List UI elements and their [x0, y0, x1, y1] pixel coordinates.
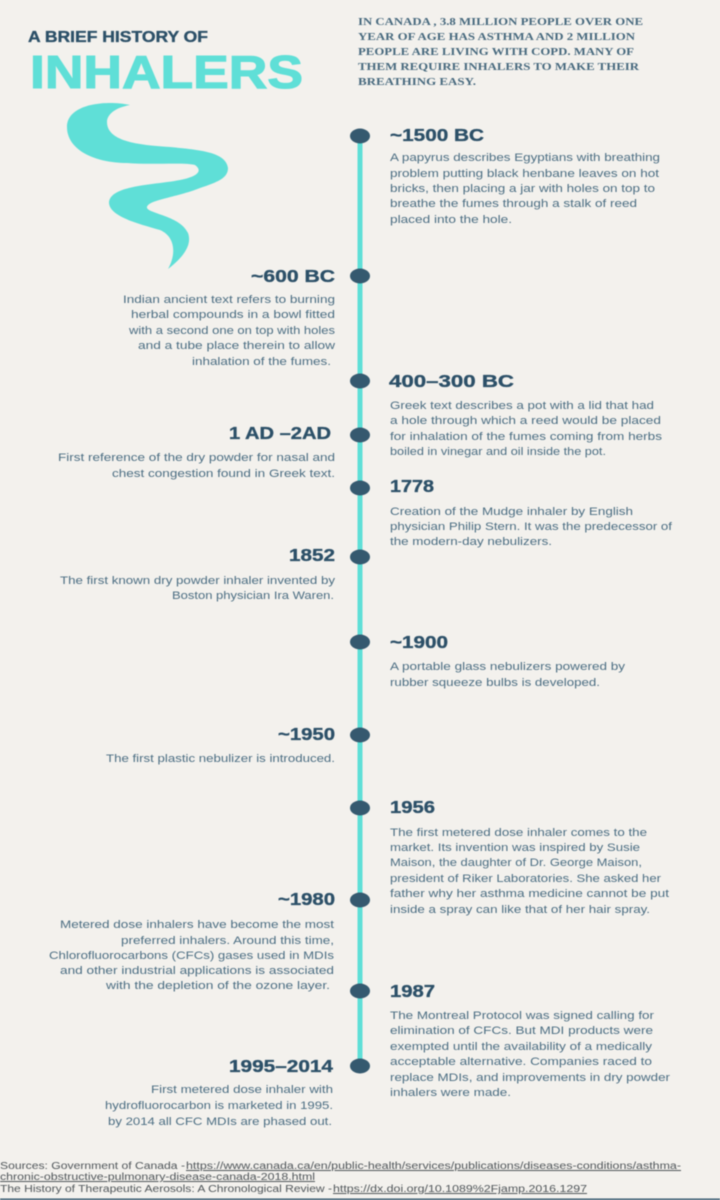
event: ~1900	[390, 632, 626, 689]
event: 1987: elimination of CFCs. But MDI products were	[390, 1025, 653, 1037]
event: 1852: The first known dry powder inhaler invented by	[60, 575, 336, 587]
event: 1956: market. Its invention was inspired by Susie	[390, 842, 640, 854]
event: ~600 BC	[123, 266, 336, 368]
event: 1778: 1778	[390, 476, 434, 496]
event: ~1980: with the depletion of the ozone layer.	[105, 980, 330, 992]
event: 1987	[390, 981, 670, 1099]
event: 1778: physician Philip Stern. It was the predecessor of	[390, 521, 673, 533]
event: 1852	[60, 545, 336, 602]
event: 400-300 BC	[389, 371, 663, 458]
event: 400-300 BC: 400–300 BC	[389, 371, 514, 391]
event: ~1900: ~1900	[390, 632, 448, 652]
event: 1 AD - 2AD: 1 AD –2AD	[229, 423, 331, 443]
event: ~1980	[49, 889, 335, 992]
event: 400-300 BC: for inhalation of the fumes coming from herbs	[390, 431, 663, 443]
intro text block: YEAR OF AGE HAS ASTHMA AND 2 MILLION	[358, 31, 635, 43]
event: 400-300 BC: a hole through which a reed would be placed	[390, 415, 661, 427]
event: 1995-2014: 1995–2014	[229, 1056, 333, 1076]
event: 1 AD - 2AD: First reference of the dry powder for nasal and	[58, 452, 335, 464]
sources	[0, 1161, 681, 1195]
event: 1852: 1852	[289, 545, 335, 565]
event: 1995-2014: by 2014 all CFC MDIs are phased out.	[108, 1116, 332, 1128]
event: ~600 BC: ~600 BC	[251, 266, 335, 286]
event: 1956: father why her asthma medicine cannot be put	[390, 888, 669, 900]
event: ~1500 BC: ~1500 BC	[390, 125, 484, 145]
event: ~1900: A portable glass nebulizers powered by	[390, 661, 626, 673]
event: ~1500 BC: A papyrus describes Egyptians with breathing	[390, 152, 660, 164]
event: 1987: inhalers were made.	[390, 1087, 511, 1099]
event: ~1500 BC	[390, 125, 660, 226]
event: ~1950: The first plastic nebulizer is introduced.	[106, 753, 335, 765]
event: ~1950: ~1950	[278, 724, 335, 744]
event: 1956	[390, 797, 669, 916]
event: 1 AD - 2AD: chest congestion found in Greek text.	[112, 468, 335, 480]
event: 1956: Maison, the daughter of Dr. George Maison,	[390, 857, 642, 869]
event: 1956: president of Riker Laboratories. She asked her	[390, 873, 661, 885]
event: ~1980: Chlorofluorocarbons (CFCs) gases used in MDIs	[49, 950, 335, 962]
event: ~1500 BC: bricks, then placing a jar with holes on top to	[390, 183, 655, 195]
event: 1987: acceptable alternative. Companies raced to	[390, 1056, 652, 1068]
event: 1852: Boston physician Ira Waren.	[172, 590, 334, 602]
event: 1778: Creation of the Mudge inhaler by English	[390, 506, 633, 518]
event: ~600 BC: inhalation of the fumes.	[192, 356, 331, 368]
intro text block: IN CANADA , 3.8 MILLION PEOPLE OVER ONE	[358, 16, 643, 28]
event: ~600 BC: Indian ancient text refers to burning	[123, 294, 335, 306]
event: 1956: 1956	[390, 797, 435, 817]
event: ~1900: rubber squeeze bulbs is developed.	[390, 677, 600, 689]
icon: smoke swirl	[67, 103, 228, 269]
event: 400-300 BC: boiled in vinegar and oil inside the pot.	[390, 446, 606, 458]
event: ~1980: and other industrial applications is associated	[60, 965, 334, 977]
event: 1987: The Montreal Protocol was signed calling for	[390, 1010, 654, 1022]
event: 1987: 1987	[390, 981, 435, 1001]
event: ~1500 BC: placed into the hole.	[390, 214, 512, 226]
event: 1956: inside a spray can like that of her hair spray.	[390, 904, 650, 916]
intro text block: BREATHING EASY.	[358, 76, 476, 88]
event: 1 AD - 2AD	[58, 423, 335, 480]
event: ~600 BC: herbal compounds in a bowl fitted	[131, 309, 335, 321]
sources: https://www.canada.ca/en/public-health/services/publications/diseases-conditions/asthma-	[186, 1161, 681, 1172]
event: ~1980: ~1980	[278, 889, 335, 909]
event: 1778	[390, 476, 673, 548]
title: INHALERS	[30, 46, 303, 98]
event: ~600 BC: and a tube place therein to allow	[138, 340, 335, 352]
event: 1995-2014	[105, 1056, 333, 1128]
sources: chronic-obstructive-pulmonary-disease-canada-2018.html	[0, 1172, 315, 1183]
sources: Sources: Government of Canada -	[0, 1161, 185, 1172]
sources: The History of Therapeutic Aerosols: A Chronological Review -	[0, 1184, 332, 1195]
timeline axis	[350, 128, 370, 1074]
event: 1987: exempted until the availability of a medically	[390, 1041, 653, 1053]
intro text block: THEM REQUIRE INHALERS TO MAKE THEIR	[358, 61, 640, 73]
event: 1995-2014: hydrofluorocarbon is marketed in 1995.	[105, 1100, 333, 1112]
event: 1778: the modern-day nebulizers.	[390, 536, 552, 548]
event: ~600 BC: with a second one on top with holes	[128, 325, 336, 337]
title: A BRIEF HISTORY OF	[28, 29, 208, 46]
event: ~1980: Metered dose inhalers have become the most	[60, 919, 334, 931]
intro text block	[358, 16, 643, 88]
sources: https://dx.doi.org/10.1089%2Fjamp.2016.1297	[333, 1184, 588, 1195]
event: ~1500 BC: problem putting black henbane leaves on hot	[390, 168, 659, 180]
intro text block: PEOPLE ARE LIVING WITH COPD. MANY OF	[358, 46, 634, 58]
event: 1956: The first metered dose inhaler comes to the	[390, 827, 647, 839]
event: ~1980: preferred inhalers. Around this time,	[121, 935, 334, 947]
event: 1987: replace MDIs, and improvements in dry powder	[390, 1072, 670, 1084]
event: 1995-2014: First metered dose inhaler with	[151, 1084, 333, 1096]
title	[28, 29, 303, 98]
event: 400-300 BC: Greek text describes a pot with a lid that had	[390, 400, 654, 412]
event: ~1500 BC: breathe the fumes through a stalk of reed	[390, 198, 637, 210]
event: ~1950	[106, 724, 335, 765]
